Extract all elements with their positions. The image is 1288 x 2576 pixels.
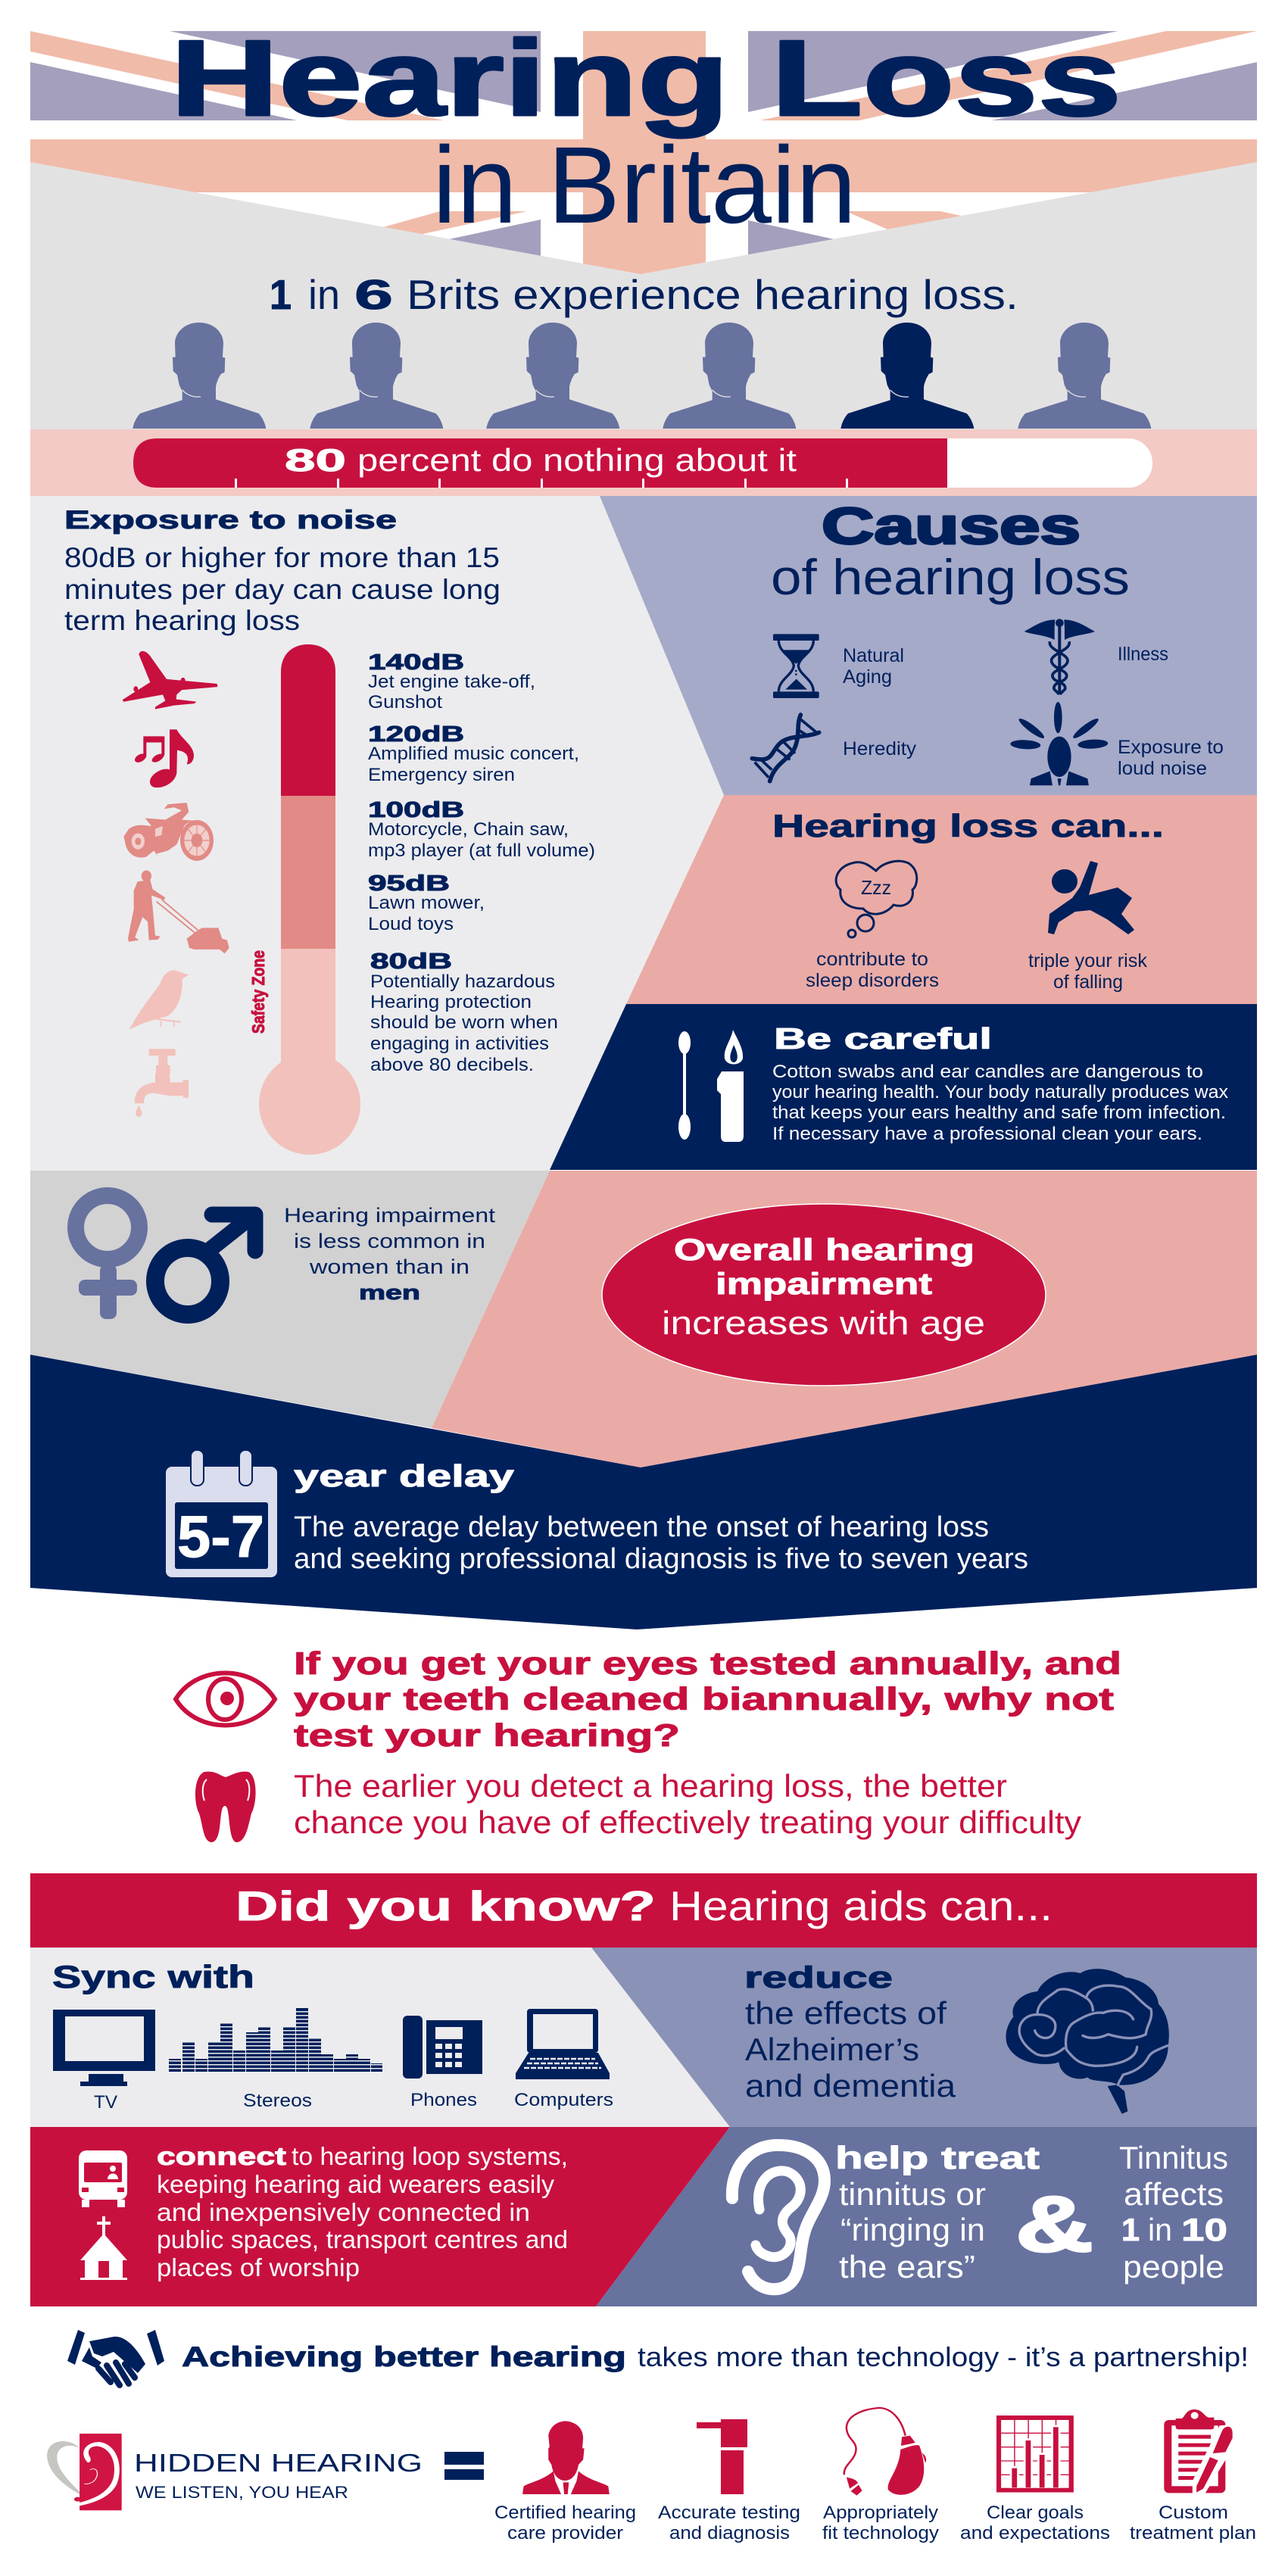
icon: dripping tap: [135, 1049, 189, 1117]
item: appropriately fit technology: fit technology: [822, 2523, 939, 2543]
banner: did you know: Hearing aids can...: [669, 1882, 1053, 1929]
text: help treat tinnitus: tinnitus or: [839, 2176, 986, 2212]
icon: eye: [176, 1673, 275, 1725]
text: eyes and teeth question: [294, 1645, 1121, 1753]
text: illness: Illness: [1118, 644, 1168, 665]
label: 140dB: Gunshot: [368, 692, 442, 713]
labels: device names: [94, 2090, 613, 2113]
title: Hearing Loss: [170, 18, 1121, 139]
icon: calendar 5-7: 5-7: [177, 1503, 264, 1570]
text: earlier detection: The earlier you detect a hearing loss, the better: [294, 1768, 1007, 1804]
banner: did you know: [30, 1873, 1257, 1948]
icon: equals sign: [444, 2452, 484, 2480]
label: 120dB: [368, 722, 579, 785]
text: help treat tinnitus: “ringing in: [840, 2212, 985, 2247]
icons: six people silhouettes: [133, 323, 1151, 429]
label: 140dB: [368, 650, 535, 713]
item: custom treatment plan: [1130, 2409, 1256, 2543]
text: hearing impairment less common in women: [284, 1204, 496, 1304]
label: 80dB: [370, 950, 558, 1075]
progress bar: 80 percent: 80: [285, 442, 346, 478]
text: exposure description: [64, 542, 501, 636]
icon: bus: [79, 2150, 127, 2207]
icon: brain: [1006, 1969, 1169, 2114]
text: contribute to sleep disorders: sleep disorders: [806, 970, 939, 991]
icon: ear candle: [717, 1030, 744, 1142]
heading: causes: Causes: [822, 497, 1081, 555]
label: 140dB: Jet engine take-off,: [368, 672, 535, 692]
text: hearing impairment less common in women: is less common in: [294, 1230, 485, 1252]
item: appropriately fit technology: [822, 2408, 939, 2543]
label: 100dB: 100dB: [368, 798, 464, 822]
progress bar: 80 percent: percent do nothing about it: [357, 442, 797, 478]
panel: exposure to noise: [30, 496, 724, 1171]
text: tinnitus affects 1 in 10 people: affects: [1124, 2176, 1224, 2212]
banner: did you know: Did you know?: [235, 1882, 656, 1929]
statistic: 1 in 6 Brits: 1: [270, 271, 292, 318]
text: achieving better hearing: [182, 2341, 1249, 2372]
text: exposure to loud noise: Exposure to: [1118, 737, 1224, 758]
text: triple your risk of falling: triple your risk: [1028, 950, 1148, 971]
text: reduce the effects: and dementia: [745, 2068, 956, 2104]
icon: sleep thought cloud: Zzz: [861, 876, 891, 899]
text: hearing impairment less common in women: Hearing impairment: [284, 1204, 496, 1227]
item: accurate testing and diagnosis: [658, 2419, 800, 2543]
item: certified hearing care provider: care provider: [507, 2523, 623, 2543]
panel: be careful: [550, 1004, 1257, 1170]
icon: church: [80, 2216, 127, 2280]
text: reduce the effects: [744, 1961, 956, 2104]
text: connect description: to hearing loop systems,: [292, 2142, 568, 2170]
text: help treat tinnitus: help treat: [835, 2140, 1040, 2175]
text: reduce the effects: the effects of: [745, 1995, 947, 2031]
item: accurate testing and diagnosis: Accurate testing: [658, 2503, 800, 2523]
item: appropriately fit technology: Appropriately: [823, 2503, 938, 2523]
text: eyes and teeth question: If you get your eyes tested annually, and: [294, 1645, 1121, 1681]
panel: sync with: [30, 1948, 730, 2127]
text: tinnitus affects 1 in 10 people: Tinnitus: [1119, 2140, 1228, 2175]
label: 80dB: Hearing protection: [370, 992, 532, 1012]
item: certified hearing care provider: [494, 2421, 636, 2543]
text: exposure to loud noise: [1118, 737, 1224, 779]
panel: help treat tinnitus: [596, 2127, 1257, 2306]
text: tinnitus affects 1 in 10 people: people: [1123, 2249, 1224, 2284]
statistic: 1 in 6 Brits: Brits experience hearing loss.: [407, 271, 1018, 318]
text: exposure to loud noise: loud noise: [1118, 758, 1207, 779]
label: 80dB: Potentially hazardous: [370, 971, 555, 992]
text: exposure description: term hearing loss: [64, 605, 300, 636]
icon: motorcycle: [123, 803, 211, 859]
text: help treat tinnitus: the ears”: [839, 2249, 975, 2284]
heading: sync with: Sync with: [52, 1959, 254, 1994]
text: exposure description: minutes per day can cause long: [64, 574, 501, 605]
text: hearing impairment less common in women: men: [359, 1281, 420, 1304]
label: 120dB: 120dB: [368, 722, 464, 747]
text: natural aging: Aging: [843, 666, 892, 688]
text: heredity: Heredity: [843, 738, 917, 759]
text: achieving better hearing: Achieving better hearing: [182, 2341, 626, 2372]
label: 140dB: 140dB: [368, 650, 464, 675]
text: exposure description: 80dB or higher for more than 15: [64, 542, 500, 573]
labels: device names: Computers: [514, 2090, 613, 2110]
icon: TV: [53, 2010, 155, 2086]
logo: Hidden Hearing: [47, 2434, 423, 2510]
title: [170, 18, 1121, 246]
text: connect description: [157, 2142, 568, 2281]
text: tinnitus affects 1 in 10 people: 1: [1121, 2212, 1140, 2247]
chart: decibel thermometer: Safety Zone: [248, 950, 268, 1034]
callout: overall hearing impairment increases with age: [602, 1204, 1046, 1386]
item: custom treatment plan: Custom: [1159, 2503, 1228, 2523]
heading: hearing loss can: Hearing loss can...: [772, 808, 1164, 844]
heading: exposure to noise: Exposure to noise: [64, 506, 397, 535]
text: connect description: keeping hearing aid wearers easily: [157, 2170, 555, 2198]
heading: year delay: year delay: [294, 1458, 514, 1493]
text: tinnitus affects 1 in 10 people: [1119, 2140, 1228, 2284]
icon: tooth: [195, 1772, 256, 1842]
callout: overall hearing impairment increases with age: impairment: [716, 1268, 932, 1301]
text: achieving better hearing: takes more than technology - it’s a partnership!: [638, 2341, 1249, 2372]
heading: causes: [771, 497, 1130, 605]
icon: sleep thought cloud: [836, 861, 917, 937]
chart: decibel thermometer: [248, 644, 360, 1155]
text: connect description: public spaces, transport centres and: [157, 2225, 568, 2253]
text: earlier detection: chance you have of effectively treating your difficulty: [294, 1804, 1081, 1840]
label: 80dB: engaging in activities: [370, 1034, 549, 1054]
text: triple your risk of falling: [1028, 950, 1148, 993]
logo: Hidden Hearing: HIDDEN HEARING: [134, 2449, 423, 2477]
text: contribute to sleep disorders: contribute to: [816, 949, 928, 970]
panel: reduce alzheimer's: [591, 1948, 1257, 2127]
item: custom treatment plan: treatment plan: [1130, 2523, 1256, 2543]
icon: ear: [732, 2145, 825, 2289]
icon: DNA helix: [752, 715, 819, 781]
text: eyes and teeth question: test your hearing?: [294, 1717, 680, 1753]
icon: caduceus: [1024, 619, 1095, 694]
panel: age: [432, 1171, 1257, 1467]
icon: hourglass: [773, 634, 819, 698]
label: 120dB: Emergency siren: [368, 765, 515, 785]
progress bar: 80 percent: [30, 429, 1257, 496]
text: contribute to sleep disorders: [806, 949, 939, 991]
text: be careful description: [772, 1062, 1228, 1144]
text: delay description: and seeking professional diagnosis is five to seven years: [294, 1543, 1028, 1575]
text: be careful description: your hearing health. Your body naturally produces wax: [772, 1082, 1228, 1102]
panel: causes of hearing loss: [600, 496, 1257, 795]
item: accurate testing and diagnosis: and diagnosis: [669, 2523, 790, 2543]
item: certified hearing care provider: Certified hearing: [494, 2503, 636, 2523]
label: 80dB: above 80 decibels.: [370, 1055, 534, 1075]
heading: be careful: Be careful: [774, 1023, 992, 1056]
label: 100dB: mp3 player (at full volume): [368, 840, 595, 861]
icon: man with lawn mower: [128, 870, 229, 953]
text: delay description: [294, 1511, 1028, 1575]
text: tinnitus affects 1 in 10 people: 10: [1181, 2212, 1227, 2247]
text: connect description: and inexpensively connected in: [157, 2198, 530, 2226]
text: triple your risk of falling: of falling: [1053, 971, 1123, 993]
text: earlier detection: [294, 1768, 1081, 1840]
icon: falling person: [1048, 861, 1134, 934]
callout: overall hearing impairment increases with age: increases with age: [662, 1305, 985, 1342]
icon: male symbol: [155, 1215, 255, 1315]
label: 120dB: Amplified music concert,: [368, 744, 579, 764]
labels: device names: Stereos: [243, 2091, 312, 2111]
text: eyes and teeth question: your teeth cleaned biannually, why not: [294, 1681, 1114, 1717]
item: clear goals and expectations: Clear goals: [987, 2503, 1084, 2523]
item: clear goals and expectations: and expectations: [960, 2523, 1110, 2543]
icon: laptop: [516, 2009, 610, 2079]
icon: female symbol: [76, 1196, 139, 1319]
icon: stereo equaliser: [169, 2008, 382, 2072]
label: 95dB: [368, 872, 485, 934]
text: hearing impairment less common in women: women than in: [309, 1255, 469, 1278]
text: natural aging: Natural: [843, 645, 904, 666]
icon: ampersand: &: [1015, 2181, 1093, 2269]
icon: phone: [403, 2016, 482, 2079]
text: connect description: places of worship: [157, 2253, 360, 2281]
label: 80dB: 80dB: [370, 950, 452, 974]
text: reduce the effects: Alzheimer’s: [745, 2032, 919, 2067]
icon: cotton swab: [678, 1031, 691, 1140]
labels: device names: TV: [94, 2092, 117, 2113]
icon: calendar 5-7: [166, 1450, 277, 1577]
text: be careful description: that keeps your ears healthy and safe from infection.: [772, 1102, 1226, 1123]
item: clear goals and expectations: [960, 2418, 1110, 2543]
banner: union flag background: [30, 31, 1257, 288]
heading: causes: of hearing loss: [771, 549, 1130, 605]
text: be careful description: If necessary have a professional clean your ears.: [772, 1124, 1202, 1144]
title: in Britain: [432, 124, 856, 246]
statistic: 1 in 6 Brits: 6: [354, 271, 393, 318]
logo: Hidden Hearing: WE LISTEN, YOU HEAR: [136, 2483, 348, 2502]
callout: overall hearing impairment increases with age: Overall hearing: [674, 1233, 975, 1267]
icon: handshake: [67, 2330, 164, 2385]
icon: music notes: [135, 729, 194, 787]
text: reduce the effects: reduce: [744, 1961, 893, 1994]
icon: head with noise rays: [1010, 702, 1109, 785]
label: 100dB: [368, 798, 595, 861]
text: tinnitus affects 1 in 10 people: in: [1148, 2212, 1172, 2247]
text: delay description: The average delay between the onset of hearing loss: [294, 1511, 989, 1543]
label: 95dB: Lawn mower,: [368, 893, 485, 913]
statistic: 1 in 6 Brits: in: [308, 271, 340, 318]
panel: grey chevron background: [30, 162, 1257, 429]
label: 95dB: 95dB: [368, 872, 450, 896]
icon: bird: [129, 971, 189, 1030]
text: help treat tinnitus: [835, 2140, 1040, 2284]
text: natural aging: [843, 645, 904, 688]
panel: hearing loss can: [626, 795, 1257, 1004]
panel: connect to hearing loops: [30, 2127, 730, 2306]
panel: year delay: [30, 1355, 1257, 1629]
label: 80dB: should be worn when: [370, 1012, 558, 1033]
label: 95dB: Loud toys: [368, 914, 454, 934]
icon: aeroplane: [123, 651, 217, 709]
labels: device names: Phones: [410, 2090, 477, 2110]
text: be careful description: Cotton swabs and ear candles are dangerous to: [772, 1062, 1203, 1082]
text: connect description: connect: [157, 2142, 286, 2170]
label: 100dB: Motorcycle, Chain saw,: [368, 819, 569, 840]
panel: gender: [30, 1171, 550, 1428]
